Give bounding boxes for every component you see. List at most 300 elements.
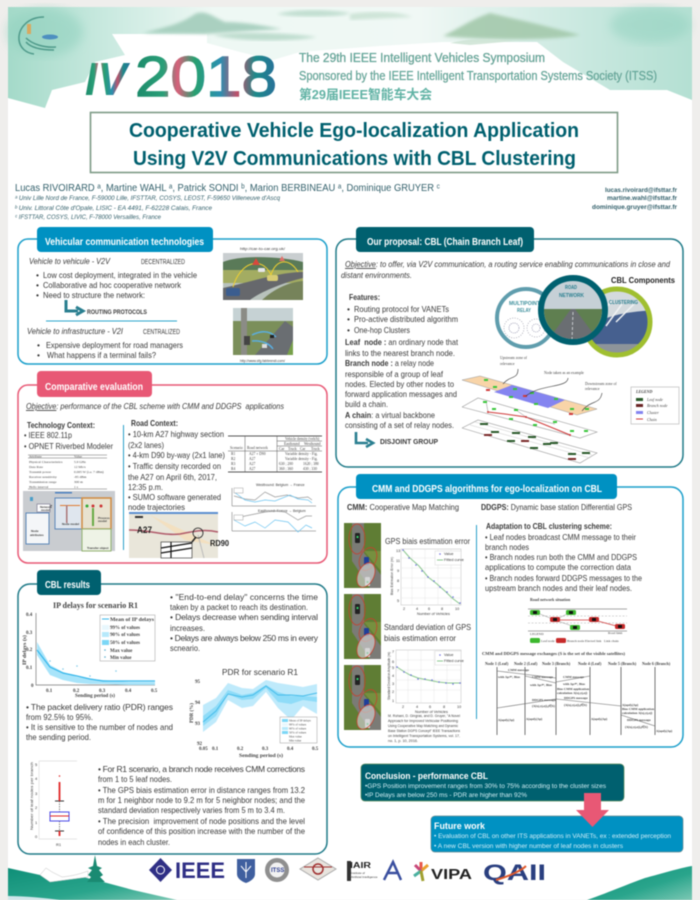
- conference name lines: [299, 50, 657, 102]
- road network situation diagram: [528, 597, 627, 643]
- photo: V2V cars on road: http://car-to-car.org.uk/: [240, 247, 285, 251]
- road context: 12:35 p.m.: [128, 482, 163, 492]
- message exchange sequence diagram: Δ(apd)ᵢ(Δp): [656, 729, 672, 733]
- chart: leaf nodes boxplot: 4: [35, 776, 38, 781]
- author emails: [592, 188, 678, 211]
- chart legend: Mean of IP delays: [110, 618, 154, 623]
- bottom right mountains decoration: [587, 866, 692, 900]
- message exchange sequence diagram: (Δ(xj,yj,zj),j∈S): [625, 725, 648, 729]
- conference logo swirl: [19, 17, 58, 54]
- circle: road network: ROAD: [565, 285, 577, 291]
- scenario table: 630 ; 200: [279, 462, 293, 466]
- road context: • SUMO software generated: [128, 492, 221, 502]
- panel heading: Our proposal: CBL (Chain Branch Leaf): [367, 236, 523, 248]
- diagram legend: Branch node: [647, 403, 668, 408]
- chart legend: 50% of values: [289, 730, 307, 734]
- features and definitions: Branch node : a relay node: [345, 358, 434, 368]
- OPNET screenshot: Process: [98, 516, 110, 520]
- objective: Objective: performance of the CBL scheme with CMM and DDGPS applications: [26, 401, 285, 411]
- OPNET screenshot: Node: [31, 529, 39, 533]
- chart: PDR: 0.05: [199, 747, 208, 752]
- chart: bias estimation error: 13: [396, 549, 400, 553]
- message exchange sequence diagram: calculation Δ(xj,yj,zj): [622, 711, 652, 715]
- author emails: dominique.gruyer@ifsttar.fr: [592, 205, 678, 211]
- standard deviation heading: biais estimation error: [384, 633, 456, 643]
- scenario table: R3: [231, 462, 235, 466]
- diagram legend: [631, 387, 679, 424]
- scenario table: 360 ; 360: [279, 467, 293, 471]
- adaptation to CBL text: applications to compute the correction data: [485, 562, 631, 572]
- chart: standard deviation: 7: [392, 650, 394, 654]
- R1 scenario text: [98, 764, 305, 847]
- citation: [388, 714, 460, 743]
- chart: PDR: 94: [195, 701, 200, 706]
- panel heading: [37, 371, 152, 397]
- parameter table: Transmission range: [29, 480, 57, 484]
- diagram legend: LEGEND: [635, 389, 653, 394]
- chart: IP delays: 0.1: [46, 689, 53, 694]
- chart: bias estimation error: 6: [428, 607, 430, 611]
- parameter table: 1 s: [74, 485, 79, 489]
- scenario table: Scenario: [230, 446, 243, 450]
- future work box: [431, 816, 683, 852]
- R1 scenario text: • The precision improvement of node positions and the level: [98, 816, 305, 826]
- end-to-end delay text: [170, 592, 319, 653]
- map of A27 and RD90: RD90: [210, 539, 230, 548]
- map of A27 and RD90: [129, 512, 230, 558]
- panel: vehicular communication technologies: [18, 227, 327, 364]
- message exchange sequence diagram: Node 2 (Leaf): [514, 661, 538, 666]
- future work box: • Evaluation of CBL on other ITS applications in VANETs, ex : extended perception: [434, 833, 671, 840]
- chart legend: Min value: [110, 656, 132, 661]
- features and definitions: •: [347, 304, 350, 314]
- conclusion box: [361, 764, 624, 801]
- logo: VIPA: VIPA: [431, 866, 472, 883]
- logo: ITSS: ITSS: [271, 868, 284, 874]
- features and definitions: Pro-active distributed algorithm: [354, 314, 458, 324]
- V2V text block: •: [36, 270, 39, 280]
- panel heading: [356, 227, 534, 252]
- arrow to disjoint group: [356, 432, 373, 447]
- objective: [341, 259, 670, 280]
- future work box: Future work: [434, 821, 486, 832]
- future work box: • A new CBL version with higher number of leaf nodes in clusters: [434, 843, 624, 850]
- citation: Approach for Improved Vehicular Positioning: [388, 719, 458, 723]
- chart: leaf nodes boxplot: 0: [35, 834, 38, 839]
- message exchange sequence diagram: Node 3 (Branch): [542, 661, 571, 666]
- end-to-end delay text: • "End-to-end delay" concerns the time: [170, 592, 318, 602]
- features and definitions: nodes. Elected by other nodes to: [345, 379, 454, 389]
- chart: standard deviation: Fitted curve: [444, 659, 464, 663]
- scenario table: Car: [279, 447, 285, 451]
- chart: standard deviation: 6: [392, 660, 394, 664]
- chart: standard deviation: [387, 650, 464, 714]
- diagram legend: Chain: [647, 417, 657, 422]
- adaptation to CBL text: • Branch nodes run both the CMM and DDGPS: [485, 552, 637, 562]
- conclusion box: •IP Delays are below 250 ms - PDR are higher than 92%: [365, 792, 527, 799]
- chart: leaf nodes boxplot: 5: [35, 762, 38, 767]
- end-to-end delay text: • Delays are always below 250 ms in every: [170, 633, 319, 643]
- chart: bias estimation error: Value: [444, 552, 453, 556]
- panel heading: [356, 474, 617, 499]
- layered CBL network diagram: relevance: [500, 362, 515, 366]
- road network situation diagram: Leaf node: [541, 639, 555, 643]
- chart: IP delays: 0.2: [26, 648, 33, 653]
- message exchange sequence diagram: DDGPS message: [532, 698, 556, 702]
- scenario table: 430 ; 330: [303, 467, 317, 471]
- chart: IP delays: 0.4: [26, 613, 33, 618]
- PDR text: • It is sensitive to the number of nodes and: [26, 722, 173, 732]
- V2V text block: •: [36, 280, 39, 290]
- chart: standard deviation: 6: [429, 705, 431, 709]
- road network situation diagram: Link chain: [604, 639, 619, 643]
- layered CBL network diagram: relevance: [585, 387, 600, 391]
- authors: Lucas RIVOIRARD ᵃ, Martine WAHL ᵃ, Patrick SONDI ᵇ, Marion BERBINEAU ᵃ, Dominique GRUYER ᶜ: [15, 183, 440, 194]
- panel heading: CMM and DDGPS algorithms for ego-localization on CBL: [372, 483, 602, 495]
- features and definitions: [345, 292, 459, 430]
- citation: Base Station DGPS Concept" IEEE Transactions: [388, 729, 460, 733]
- scenario table: R4: [231, 467, 235, 471]
- message exchange sequence diagram: CMM and DDGPS message exchanges (S is the set of the visible satellites): [482, 651, 626, 656]
- layered CBL network diagram: Upstream zone of: [500, 356, 528, 360]
- standard deviation heading: Standard deviation of GPS: [384, 622, 471, 632]
- logo: A mark: [384, 862, 401, 880]
- chart: PDR: [190, 668, 319, 759]
- arrow to routing protocols: [66, 300, 83, 315]
- parameter table: 5.9 GHz: [74, 460, 86, 464]
- message exchange sequence diagram: Node 1 (Leaf): [485, 661, 509, 666]
- road scenes: [344, 523, 381, 732]
- chart: PDR: 0.4: [287, 747, 294, 752]
- message exchange sequence diagram: calculation Δ(xj,yj,zj): [557, 691, 587, 695]
- scenario table: Truck: [311, 447, 320, 451]
- chart legend: Min value: [289, 738, 302, 742]
- chart: standard deviation: Number of Vehicles: [415, 710, 448, 714]
- chart legend: Mean of IP delays: [289, 718, 312, 722]
- title box: [90, 112, 618, 172]
- chart: IP delays: 0: [31, 684, 34, 689]
- disjoint group label: DISJOINT GROUP: [380, 437, 438, 446]
- R1 scenario text: nodes in each cluster.: [98, 837, 170, 847]
- adaptation to CBL text: upstream branch nodes and their leaf nodes.: [485, 583, 632, 593]
- scenario table: Westbound: [304, 442, 321, 446]
- parameter table: 12 Mb/s: [74, 465, 86, 469]
- R1 scenario text: m for 1 neighbor node to 9.2 m for 5 neighbor nodes; and the: [98, 795, 305, 805]
- circle: clustering: [584, 289, 655, 360]
- V2V text block: Collaborative ad hoc cooperative network: [43, 280, 182, 290]
- parameter table: Attribute: [29, 454, 42, 458]
- technology context: • IEEE 802.11p: [24, 430, 72, 440]
- chart: leaf nodes boxplot: R1: [56, 842, 62, 847]
- CBL components circles: [497, 278, 655, 360]
- end-to-end delay text: scneario.: [170, 643, 200, 653]
- diagram legend: Leaf node: [646, 397, 663, 402]
- circle: multipoint relay: RELAY: [517, 308, 531, 314]
- scenario table: A27: [249, 462, 256, 466]
- chart: bias estimation error: Number of Vehicles: [417, 612, 450, 616]
- routing protocols label: ROUTING PROTOCOLS: [87, 309, 148, 316]
- logo: IAIR: IAIR: [350, 861, 371, 870]
- circle: multipoint relay: MULTIPOINT: [509, 301, 541, 307]
- chart: IP delays: 0.5: [151, 689, 158, 694]
- chart: standard deviation: Standard Deviation Amplitude (m): [387, 651, 391, 700]
- chart: IP delays: IP delays for scenario R1: [53, 601, 138, 610]
- message exchange sequence diagram: CMM message: [508, 668, 530, 672]
- photo: V2I roadside unit: [233, 308, 293, 363]
- layered CBL network diagram: [462, 356, 617, 463]
- chart: bias estimation error: 4: [416, 607, 418, 611]
- chart: leaf nodes boxplot: 1: [35, 820, 38, 825]
- adaptation to CBL text: • Leaf nodes broadcast CMM message to their: [485, 532, 636, 542]
- circle: multipoint relay: [497, 289, 555, 347]
- standard deviation heading: [384, 622, 471, 643]
- R1 scenario text: from 1 to 5 leaf nodes.: [98, 774, 172, 784]
- affiliations: ᵃ Univ Lille Nord de France, F-59000 Lille, IFSTTAR, COSYS, LEOST, F-59650 Villeneuve d'Ascq: [15, 196, 281, 202]
- road network situation diagram: LEGEND: [530, 632, 544, 636]
- conference name lines: The 29th IEEE Intelligent Vehicles Symposium: [299, 50, 545, 65]
- conclusion box: Conclusion - performance CBL: [365, 771, 488, 782]
- features and definitions: Features:: [349, 292, 380, 302]
- photo: V2I roadside unit: http://www.sfg.fabbrendi.com/: [240, 359, 285, 363]
- features and definitions: •: [347, 314, 350, 324]
- parameter table: Data Rate: [29, 465, 43, 469]
- chart: bias estimation error: 5: [397, 599, 399, 603]
- traffic charts: [232, 483, 316, 532]
- scenario table: 1620 ; 380: [303, 462, 319, 466]
- CBL components heading: CBL Components: [611, 275, 675, 285]
- logo: VIPA: [414, 862, 472, 883]
- features and definitions: forward application messages and: [345, 389, 457, 399]
- adaptation to CBL text: branch nodes: [485, 542, 529, 552]
- message exchange sequence diagram: Δ(apd)ᵢ(Δp): [622, 703, 638, 707]
- R1 scenario text: • For R1 scenario, a branch node receives CMM corrections: [98, 764, 305, 774]
- chart: PDR: 0.5: [312, 747, 319, 752]
- scenario table: R1: [231, 452, 235, 456]
- adaptation to CBL text: Adaptation to CBL clustering scheme:: [486, 521, 612, 531]
- adaptation to CBL text: [485, 521, 642, 593]
- scenario table: Vehicle density (veh/h): [285, 437, 320, 441]
- message exchange sequence diagram: Δ(apd)ᵢ(Δp): [591, 717, 607, 721]
- V2I text block: Expensive deployment for road managers: [46, 340, 183, 350]
- OPNET screenshot: Network: [40, 505, 52, 509]
- road network situation diagram: Road network situation: [530, 597, 571, 602]
- message exchange sequence diagram: CMM message: [563, 675, 585, 679]
- scenario table: A27: [249, 467, 256, 471]
- parameter table: 300 m: [74, 480, 83, 484]
- road context: the A27 on April 6th, 2017,: [128, 472, 217, 482]
- scenario table: Variable density - Fig.: [285, 452, 318, 456]
- panel: CMM and DDGPS algorithms: [338, 474, 683, 747]
- title box: Cooperative Vehicle Ego-localization Application: [129, 120, 579, 142]
- chart: bias estimation error: [390, 549, 464, 616]
- chart legend: 99% of values: [110, 626, 140, 631]
- message exchange sequence diagram: DDGPS message: [627, 718, 651, 722]
- logo: QAII: QAII: [483, 860, 546, 885]
- objective: distant environments.: [341, 270, 412, 280]
- traffic charts: Westbound: Belgium → France: [256, 483, 305, 487]
- parameter table: Transmit power: [29, 470, 52, 474]
- message exchange sequence diagram: (Δ(xj,yj,zj),j∈S): [564, 703, 587, 707]
- chart: PDR: Sending period (s): [239, 754, 283, 759]
- technology context: Technology Context:: [27, 420, 95, 430]
- V2V text block: Vehicle to vehicule - V2V: [29, 256, 111, 266]
- photo: V2V cars on road: [223, 247, 303, 300]
- chart legend: 99% of values: [289, 722, 307, 726]
- chart: standard deviation: 8: [443, 705, 445, 709]
- end-to-end delay text: • Delays decrease when sending interval: [170, 612, 318, 622]
- chart: PDR: 92: [197, 742, 202, 747]
- chart: IP delays: 0.1: [26, 666, 33, 671]
- parameter table: [28, 454, 107, 489]
- technology context: [24, 420, 113, 451]
- parameter table: -85 dBm: [74, 475, 87, 479]
- sponsor logos: [149, 858, 546, 885]
- message exchange sequence diagram: DDGPS message: [564, 696, 588, 700]
- message exchange sequence diagram: with Δpᵢᵍᵖˢ, Bias: [563, 682, 586, 686]
- OPNET screenshot: model: [41, 508, 50, 512]
- citation: Using Cooperative Map Matching and Dynamic: [388, 724, 458, 728]
- arrow: conclusion to future work: [576, 793, 609, 827]
- message exchange sequence diagram: CMM message: [532, 675, 554, 679]
- title box: Using V2V Communications with CBL Clustering: [133, 148, 576, 170]
- map of A27 and RD90: A27: [137, 525, 152, 535]
- logo: IAIR: Institute of: [351, 871, 365, 875]
- V2V text block: Low cost deployment, integrated in the vehicle: [43, 270, 197, 280]
- chart: standard deviation: 2: [392, 690, 394, 694]
- message exchange sequence diagram: (Δ(xj,yj,zj),j∈S): [532, 704, 555, 708]
- OPNET screenshot: [23, 491, 115, 551]
- circle: clustering: CLUSTERING: [609, 300, 638, 306]
- message exchange sequence diagram: Bias CMM application: [622, 707, 654, 711]
- chart: bias estimation error: Fitted curve: [444, 558, 464, 562]
- scenario table: A27: [249, 457, 256, 461]
- citation: on Intelligent Transportation Systems, vol. 17,: [388, 734, 460, 738]
- logo: IEEE: IEEE: [175, 858, 225, 883]
- chart: leaf nodes boxplot: 2: [35, 805, 38, 810]
- affiliations: [15, 196, 281, 221]
- road context: [128, 418, 225, 512]
- end-to-end delay text: increases.: [170, 623, 205, 633]
- V2V text block: •: [36, 290, 39, 300]
- CMM label: CMM: Cooperative Map Matching: [347, 502, 459, 512]
- chart: leaf nodes boxplot: [29, 761, 77, 847]
- scenario table: [228, 436, 322, 472]
- road network situation diagram: Elected link: [585, 639, 602, 643]
- layered CBL network diagram: Downstream zone of: [585, 382, 617, 386]
- chart legend: 90% of values: [289, 726, 307, 730]
- features and definitions: responsible of a group of leaf: [345, 369, 444, 379]
- layered CBL network diagram: Node taken as an example: [544, 371, 584, 375]
- message exchange sequence diagram: Node 4 (Leaf): [578, 661, 602, 666]
- chart: bias estimation error: 7: [397, 589, 399, 593]
- chart: PDR: PDR (%): [190, 703, 195, 723]
- V2I text block: •: [37, 340, 40, 350]
- road network situation diagram: Road limit: [608, 631, 622, 635]
- panel heading: [37, 570, 101, 595]
- traffic charts: Eastbound: France → Belgium: [258, 509, 306, 513]
- chart legend: Max value: [110, 649, 133, 654]
- V2I text block: •: [37, 350, 40, 360]
- adaptation to CBL text: • Branch nodes forward DDGPS messages to the: [485, 573, 642, 583]
- OPNET screenshot: Transfer object: [87, 546, 109, 550]
- chart: IP delays: [23, 601, 158, 699]
- chart: IP delays: Sending period (s): [75, 694, 115, 699]
- chart: PDR: 0.3: [262, 747, 269, 752]
- panel heading: [37, 227, 213, 252]
- V2I text block: Vehicle to infrastructure - V2I: [27, 326, 124, 336]
- IV 2018 wordmark: [85, 45, 277, 109]
- chart: IP delays: 0.3: [26, 631, 33, 636]
- chart: PDR: 95: [195, 680, 200, 685]
- citation: M. Rohani, D. Gingras, and D. Gruyer, "A Novel: [388, 714, 460, 718]
- chart: bias estimation error: 11: [396, 559, 400, 563]
- parameter table: Value: [74, 454, 82, 458]
- road context: • 10-km A27 highway section: [128, 429, 224, 439]
- PDR text: • The packet delivery ratio (PDR) ranges: [26, 702, 173, 712]
- chart legend: [280, 717, 317, 743]
- author emails: lucas.rivoirard@ifsttar.fr: [605, 188, 678, 194]
- chart: PDR: 0.2: [237, 747, 244, 752]
- chart: leaf nodes boxplot: Number of leaf nodes per branch: [29, 762, 34, 830]
- logo: emblem: [300, 858, 336, 880]
- chart legend: Max value: [289, 734, 302, 738]
- parameter table: Physical Characteristics: [29, 460, 63, 464]
- features and definitions: •: [347, 325, 350, 335]
- chart: bias estimation error: 2: [403, 607, 405, 611]
- road context: node trajectories: [128, 502, 185, 512]
- panel heading: Vehicular communication technologies: [45, 236, 204, 248]
- logo: IAIR: Artificial Intelligence: [351, 875, 378, 879]
- conference name lines: Sponsored by the IEEE Intelligent Transportation Systems Society (ITSS): [299, 69, 657, 83]
- features and definitions: Leaf node : an ordinary node that: [345, 337, 459, 347]
- author emails: martine.wahl@ifsttar.fr: [607, 196, 678, 202]
- circle: road network: NETWORK: [559, 293, 584, 299]
- chart legend: 50% of values: [110, 641, 140, 646]
- IV 2018 wordmark: IV: [85, 53, 130, 105]
- features and definitions: build a chain.: [345, 399, 388, 409]
- message exchange sequence diagram: Δ(apd)ᵢ(Δp): [498, 718, 514, 722]
- parameter table: 0.005 W (i.e. 7 dBm): [74, 470, 105, 474]
- panel heading: Comparative evaluation: [45, 381, 143, 393]
- chart: IP delays: IP delays (s): [23, 635, 28, 665]
- message exchange sequence diagram: Bias CMM application: [557, 687, 589, 691]
- chart: standard deviation: 4: [416, 705, 418, 709]
- chart legend: 90% of values: [110, 633, 140, 638]
- V2I text block: [27, 326, 183, 360]
- parameter table: Hello interval: [29, 485, 48, 489]
- chart: bias estimation error: 8: [441, 607, 443, 611]
- panel: comparative evaluation: [18, 371, 327, 563]
- affiliations: ᶜ IFSTTAR, COSYS, LIVIC, F-78000 Versailles, France: [15, 215, 162, 221]
- PDR text: [26, 702, 173, 742]
- chart: bias estimation error: 9: [397, 569, 399, 573]
- scenario table: Variable density - Fig.: [285, 457, 318, 461]
- scenario table: Road network: [247, 446, 268, 450]
- V2V text block: DECENTRALIZED: [141, 259, 185, 266]
- road context: • Traffic density recorded on: [128, 461, 221, 471]
- chart: bias estimation error: 10: [455, 607, 459, 611]
- logo: IAIR: [347, 861, 378, 881]
- end-to-end delay text: taken by a packet to reach its destination.: [170, 602, 308, 612]
- V2I text block: CENTRALIZED: [143, 329, 180, 336]
- V2V text block: [29, 256, 197, 300]
- OPNET screenshot: Node model: [62, 522, 79, 526]
- V2I text block: What happens if a terminal fails?: [47, 350, 156, 360]
- IV 2018 wordmark: 2018: [135, 45, 277, 109]
- chart: leaf nodes boxplot: 3: [35, 791, 38, 796]
- scenario table: R2: [231, 457, 235, 461]
- message exchange sequence diagram: Δ(apd)ᵢ(Δp): [526, 717, 542, 721]
